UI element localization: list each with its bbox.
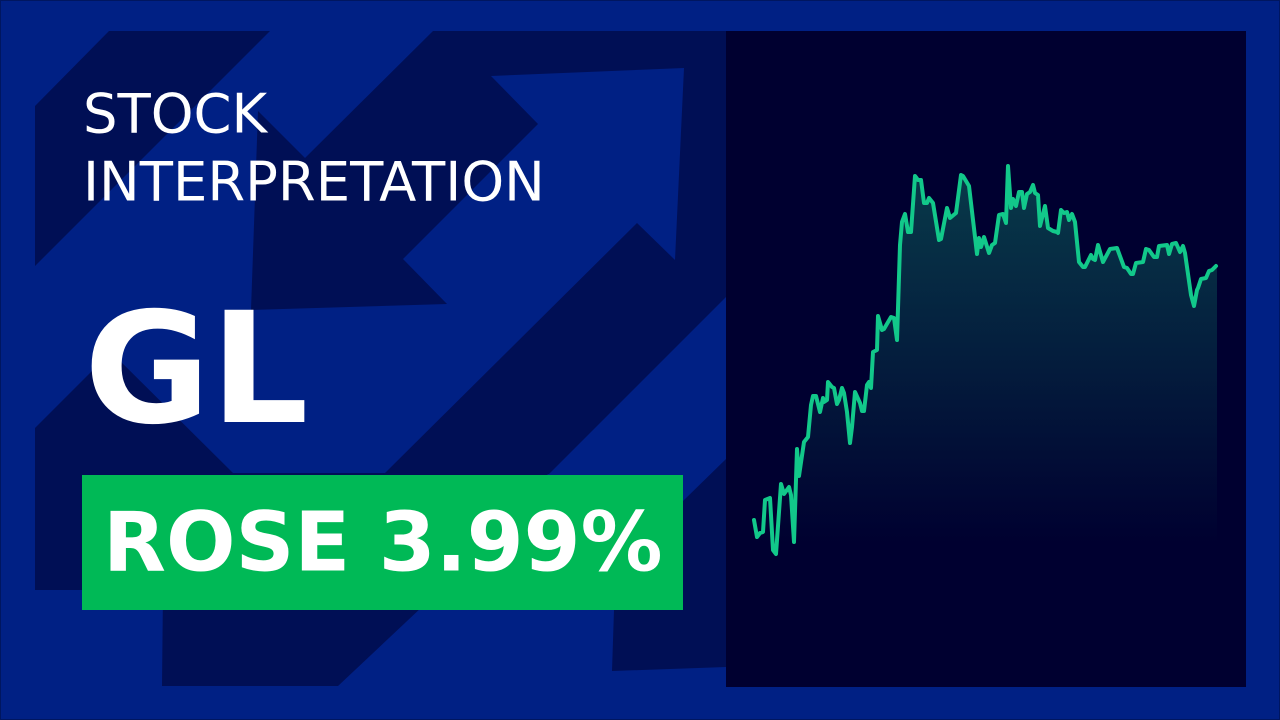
callout: change badge: ROSE 3.99% bbox=[103, 496, 663, 590]
background arrows bbox=[35, 31, 726, 686]
chart: price area bbox=[754, 166, 1217, 554]
panel: chart background bbox=[726, 31, 1246, 687]
chart: price line bbox=[754, 166, 1216, 554]
title: INTERPRETATION bbox=[83, 150, 545, 214]
ticker: GL bbox=[84, 280, 309, 459]
title bbox=[83, 82, 545, 214]
callout: change badge bbox=[82, 475, 683, 610]
title: STOCK bbox=[83, 82, 269, 146]
